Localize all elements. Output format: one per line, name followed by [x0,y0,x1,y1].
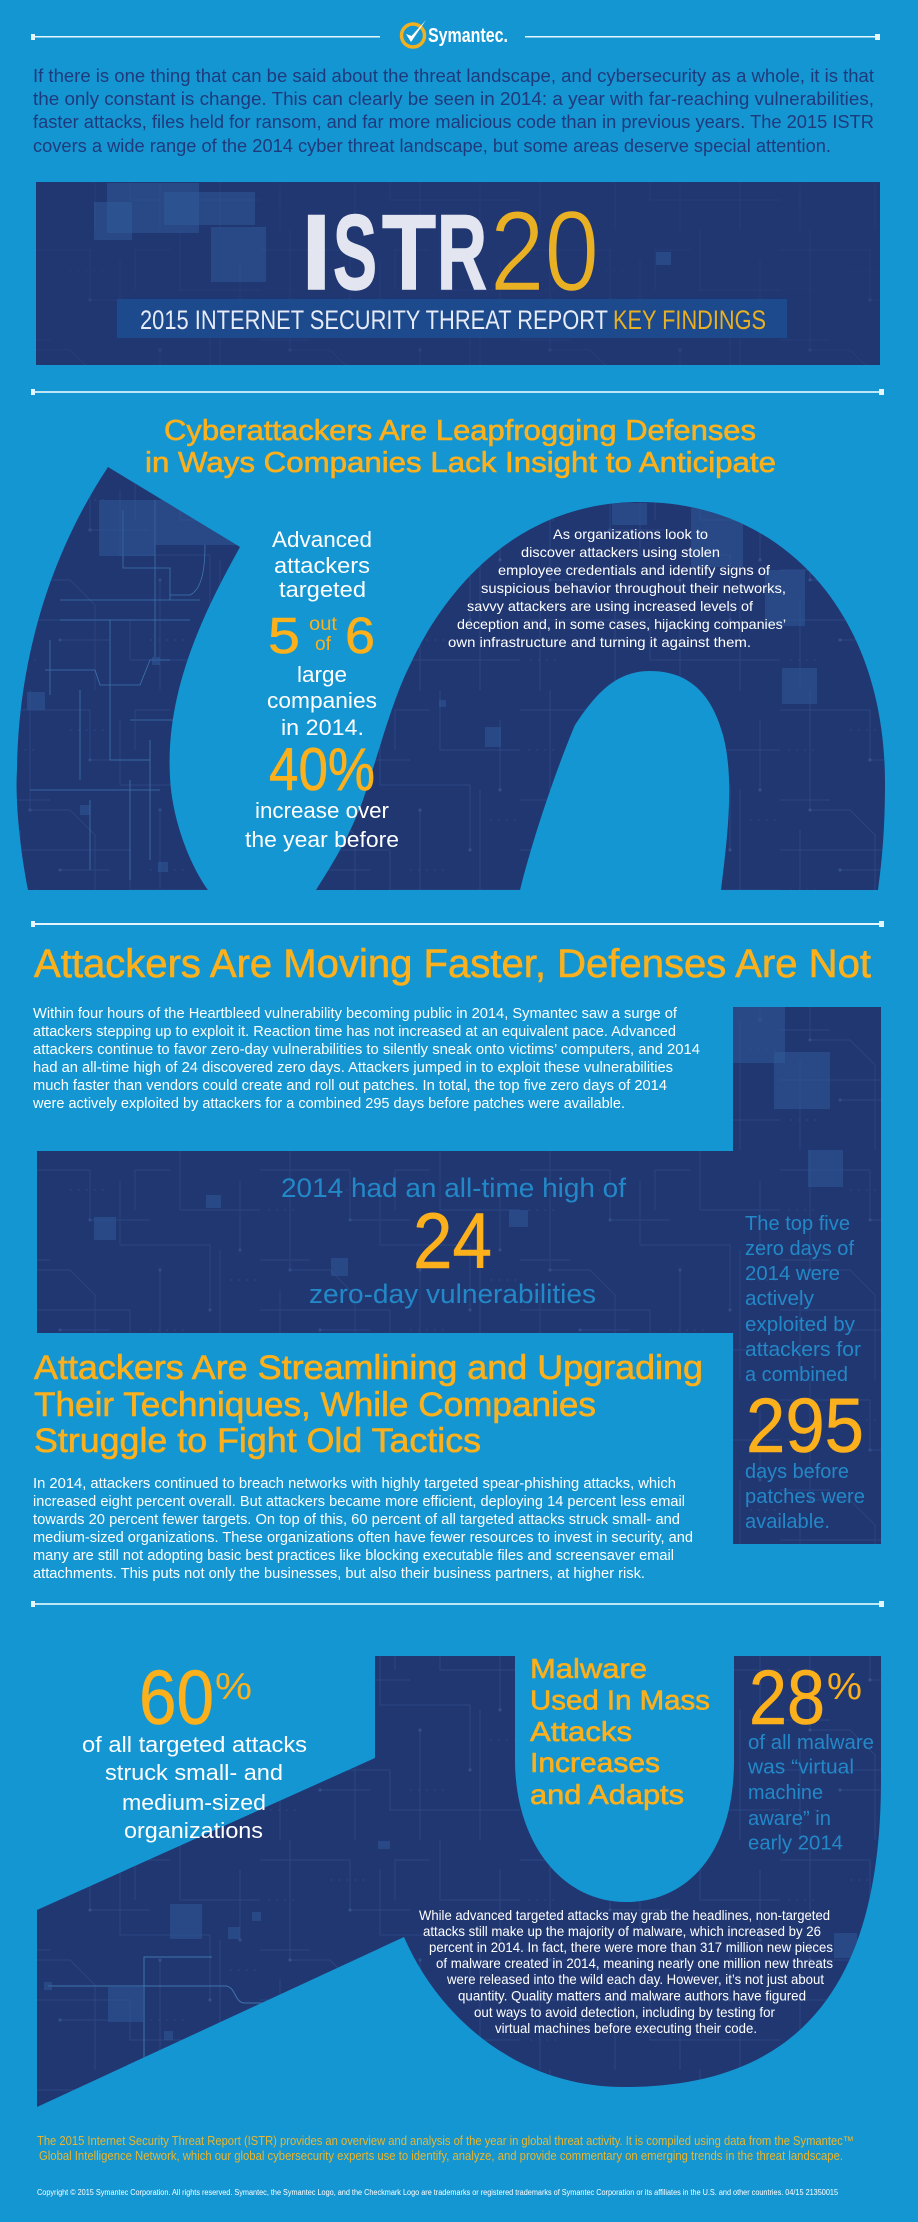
stat: 28 percent: early 2014 [748,1832,843,1854]
text: spear-phishing paragraph: increased eight percent overall. But attackers became more efficient, deploying 14 percent less email [33,1494,685,1510]
stat: 60 percent: 60 [139,1655,214,1741]
shape: L-shaped panel [30,1000,890,1550]
stat: 5 out of 6 and 40 percent: out [309,614,338,635]
stat: 295 days: actively [745,1287,815,1310]
copyright: Copyright © 2015 Symantec Corporation. All rights reserved. Symantec, the Symantec Logo, and the Checkmark Logo are trademarks or registered trademarks of Symantec Corporation or its affiliates in the U.S. and other countries. 04/15 21350015 [37,2188,839,2197]
text: spear-phishing paragraph: attachments. This puts not only the businesses, but also their business partners, at higher risk. [33,1566,645,1582]
heading: Cyberattackers: Cyberattackers Are Leapfrogging Defenses [164,415,756,447]
stat: 295 days: days before [745,1460,849,1483]
stat: 295 days: 295 [746,1383,864,1469]
text: malware paragraph: percent in 2014. In fact, there were more than 317 million new pieces [429,1939,833,1955]
stat: 5 out of 6 and 40 percent: the year before [245,827,399,852]
stat: 5 out of 6 and 40 percent: increase over [255,798,389,823]
text: arch paragraph [448,526,786,650]
text: Heartbleed paragraph: much faster than vendors could create and roll out patches. In total, the top five zero days of 2014 [33,1078,667,1094]
heading: Malware: Used In Mass [530,1684,710,1716]
stat: 28 percent: machine [748,1781,823,1804]
stat: 24 zero-day vulnerabilities: 24 [413,1196,492,1285]
stat: 295 days: exploited by [745,1313,856,1336]
text: arch paragraph: savvy attackers are using increased levels of [467,598,753,614]
stat: 5 out of 6 and 40 percent [245,527,399,852]
stat: 295 days [745,1212,865,1533]
text: malware paragraph: of malware created in 2014, meaning nearly one million new threats [436,1955,833,1971]
text: spear-phishing paragraph: towards 20 percent fewer targets. On top of this, 60 percent of all targeted attacks struck small- and [33,1512,680,1528]
stat: 5 out of 6 and 40 percent: companies [267,688,377,713]
heading: Malware: Attacks [530,1716,632,1747]
stat: 28 percent: 28 [749,1655,825,1741]
text: arch paragraph: employee credentials and identify signs of [498,562,770,578]
stat: 5 out of 6 and 40 percent: of [315,634,332,655]
stat: 295 days: attackers for [745,1338,861,1361]
text: malware paragraph: While advanced targeted attacks may grab the headlines, non-targeted [419,1907,830,1923]
shape: main arch [300,495,900,895]
text: arch paragraph: deception and, in some cases, hijacking companies’ [457,616,786,632]
stat: 5 out of 6 and 40 percent: 40% [269,736,375,803]
text: spear-phishing paragraph [33,1476,693,1582]
intro paragraph: faster attacks, files held for ransom, and far more malicious code than in previous years. The 2015 ISTR [33,112,874,132]
stat: 5 out of 6 and 40 percent: 5 [268,607,300,664]
stat: 24 zero-day vulnerabilities: 2014 had an all-time high of [281,1173,627,1203]
footer note [37,2134,854,2163]
stat: 295 days: 2014 were [745,1262,840,1285]
text: arch paragraph: discover attackers using stolen [521,544,720,560]
heading: Cyberattackers: in Ways Companies Lack Insight to Anticipate [145,447,776,479]
heading: Moving Faster: Attackers Are Moving Faster, Defenses Are Not [34,942,871,986]
text: Heartbleed paragraph: attackers stepping up to exploit it. Reaction time has not increased at an equivalent pace. Advanced [33,1024,676,1040]
ISTR logotype: T [382,192,436,312]
stat: 60 percent: organizations [124,1818,263,1843]
text: spear-phishing paragraph: many are still not adopting basic best practices like blocking executable files and screensaver email [33,1548,674,1564]
text: arch paragraph: As organizations look to [553,526,708,542]
ISTR logotype [302,192,487,312]
stat: 5 out of 6 and 40 percent: attackers [274,553,370,578]
stat: 295 days: available. [745,1510,830,1533]
heading: Streamlining: Struggle to Fight Old Tactics [34,1422,481,1460]
heading: Malware: Increases [530,1747,660,1778]
stat: 295 days: zero days of [745,1237,854,1260]
text: Heartbleed paragraph: had an all-time high of 24 discovered zero days. Attackers jumped in to exploit these vulnerabilities [33,1060,673,1076]
stat: 60 percent [82,1655,307,1843]
stat: 28 percent: was “virtual [747,1756,854,1778]
stat: 5 out of 6 and 40 percent: in 2014. [281,715,364,740]
ISTR logotype: S [333,192,377,312]
text: spear-phishing paragraph: In 2014, attackers continued to breach networks with highly targeted spear-phishing attacks, which [33,1476,676,1492]
text: malware paragraph: were released into the wild each day. However, it’s not just about [446,1971,824,1987]
text: malware paragraph: attacks still make up the majority of malware, which increased by 26 [423,1923,821,1939]
intro paragraph [33,66,874,156]
banner subtitle bar: KEY FINDINGS [613,305,766,335]
stat: 5 out of 6 and 40 percent: Advanced [272,527,372,552]
stat: 24 zero-day vulnerabilities [281,1173,627,1309]
stat: 5 out of 6 and 40 percent: 6 [345,607,375,664]
intro paragraph: covers a wide range of the 2014 cyber threat landscape, but some areas deserve special attention. [33,136,831,156]
stat: 60 percent: medium-sized [122,1790,266,1815]
heading: Streamlining: Their Techniques, While Companies [34,1386,596,1424]
stat: 60 percent: % [215,1666,252,1708]
header: Symantec logo and rule [31,20,880,47]
stat: 28 percent: % [827,1666,862,1708]
heading: Malware: and Adapts [530,1779,684,1810]
heading: Malware: Malware [530,1653,647,1684]
icon: Symantec checkmark [402,20,426,47]
stat: 60 percent: struck small- and [105,1760,283,1785]
text: Heartbleed paragraph: were actively exploited by attackers for a combined 295 days before patches were available. [32,1096,625,1112]
heading: Streamlining [34,1349,703,1460]
stat: 60 percent: of all targeted attacks [82,1732,307,1757]
text: Heartbleed paragraph [32,1006,700,1112]
text: malware paragraph [419,1907,833,2036]
intro paragraph: the only constant is change. This can clearly be seen in 2014: a year with far-reaching vulnerabilities, [33,89,874,109]
shape: left arch fragment [16,467,240,890]
stat: 295 days: patches were [745,1485,865,1508]
banner subtitle bar: 2015 INTERNET SECURITY THREAT REPORT [140,305,608,335]
heading: Cyberattackers [145,415,776,479]
text: arch paragraph: own infrastructure and turning it against them. [448,634,751,650]
text: malware paragraph: quantity. Quality matters and malware authors have figured [458,1988,806,2004]
footer note: Global Intelligence Network, which our global cybersecurity experts use to identify, analyze, and provide commentary on emerging trends in the threat landscape. [39,2149,843,2163]
stat: 28 percent: of all malware [748,1731,874,1754]
text: malware paragraph: out ways to avoid detection, including by testing for [474,2004,775,2020]
stat: 28 percent: aware” in [748,1807,831,1830]
text: malware paragraph: virtual machines before executing their code. [495,2020,757,2036]
intro paragraph: If there is one thing that can be said about the threat landscape, and cybersecurity as a whole, it is that [33,66,874,86]
banner: ISTR 20 [36,182,880,365]
stat: 5 out of 6 and 40 percent: targeted [279,577,366,602]
heading: Streamlining: Attackers Are Streamlining and Upgrading [34,1349,703,1387]
ISTR logotype: R [437,192,487,312]
shape: U arrow panel [30,1650,890,2110]
text: Heartbleed paragraph: attackers continue to favor zero-day vulnerabilities to silently sneak onto victims’ computers, and 2014 [33,1042,700,1058]
logo wordmark: Symantec. [428,25,508,47]
ISTR logotype: I [302,192,331,312]
text: spear-phishing paragraph: medium-sized organizations. These organizations often have fewer resources to invest in security, and [33,1530,693,1546]
stat: 295 days: The top five [745,1212,850,1235]
stat: 5 out of 6 and 40 percent: large [297,662,347,687]
stat: 28 percent [747,1655,874,1854]
20 logotype: 20 [490,188,599,316]
stat: 295 days: a combined [745,1363,848,1386]
text: arch paragraph: suspicious behavior throughout their networks, [481,580,786,596]
banner subtitle bar [117,299,787,338]
heading: Malware [530,1653,710,1810]
stat: 24 zero-day vulnerabilities: zero-day vulnerabilities [309,1279,596,1309]
text: Heartbleed paragraph: Within four hours of the Heartbleed vulnerability becoming public in 2014, Symantec saw a surge of [33,1006,678,1022]
